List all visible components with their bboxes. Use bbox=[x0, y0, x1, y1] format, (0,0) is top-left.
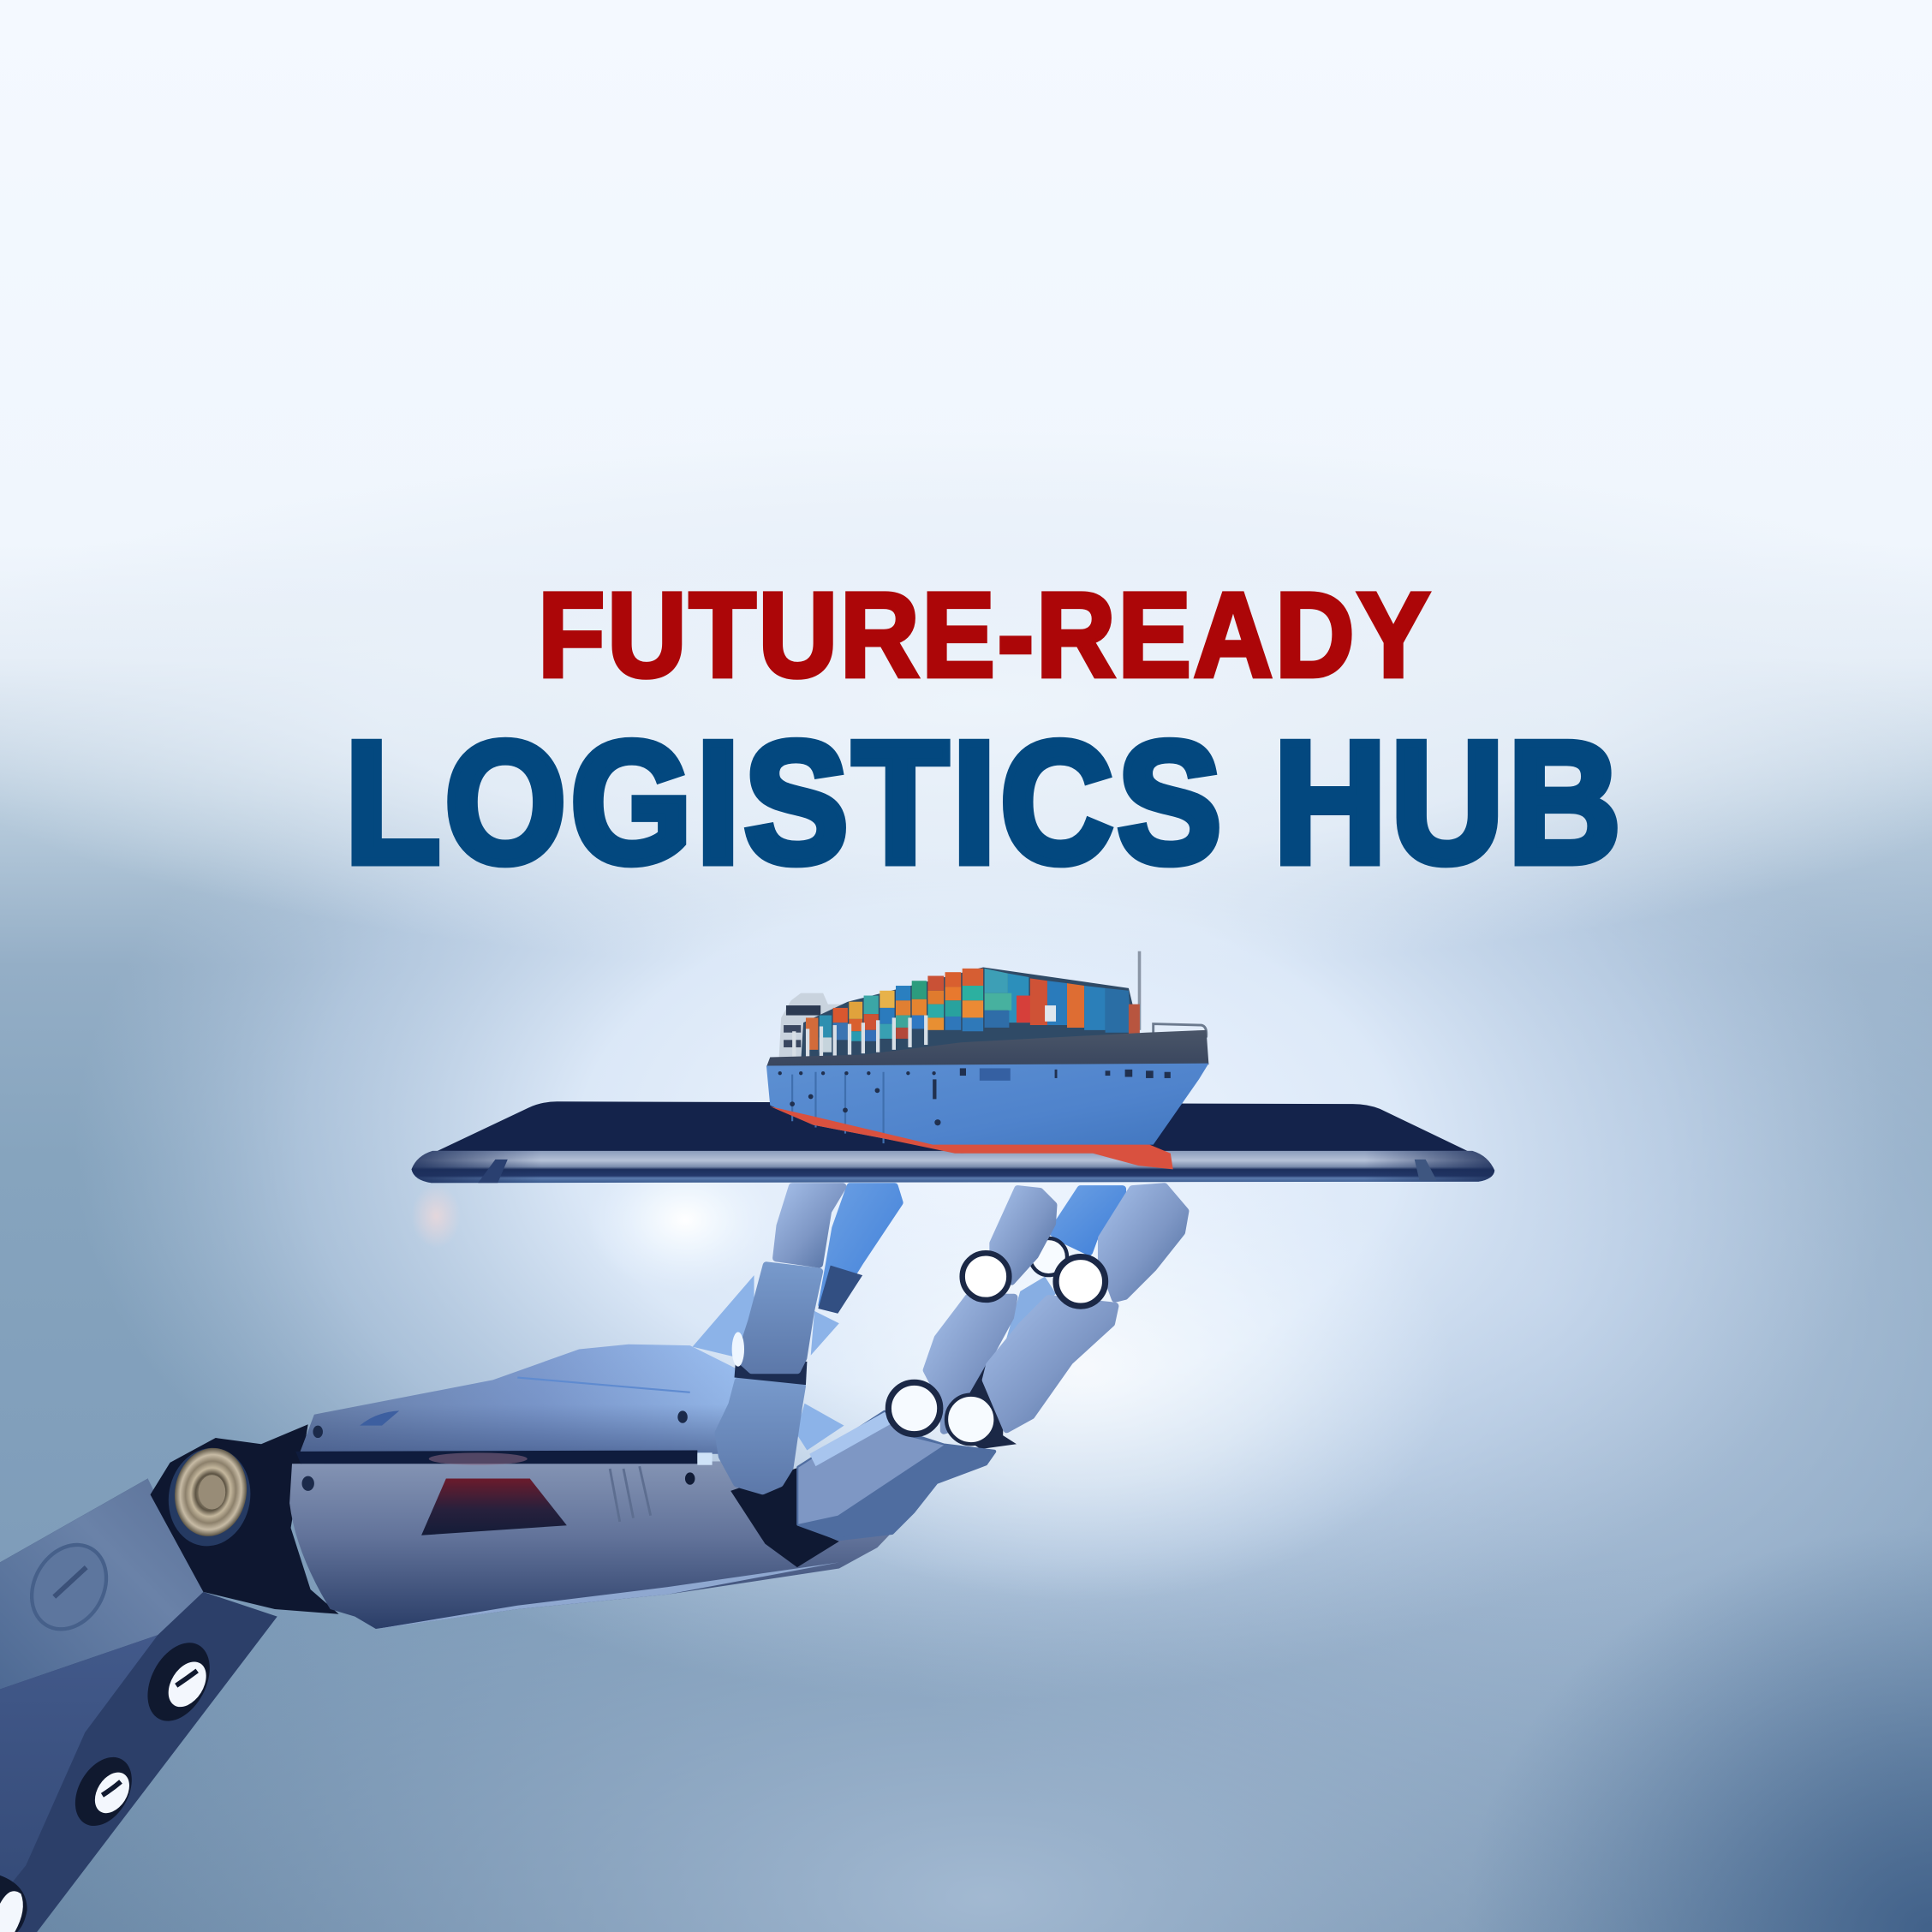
container stacks bbox=[801, 967, 1140, 1062]
title: FUTURE-READY: FUTURE-READY bbox=[538, 567, 1433, 702]
hull details bbox=[778, 1068, 1171, 1143]
robot arm bbox=[0, 1187, 1185, 1932]
tablet bbox=[412, 1101, 1494, 1183]
dark seam bbox=[295, 1450, 713, 1465]
upper arm bbox=[0, 1479, 277, 1932]
forearm lower shell bbox=[289, 1461, 930, 1629]
upper hull band bbox=[766, 1030, 1208, 1067]
deck bars bbox=[792, 1016, 927, 1062]
display window bbox=[421, 1479, 567, 1535]
superstructure bbox=[778, 993, 850, 1062]
blue hull bbox=[766, 1064, 1208, 1154]
title: LOGISTICS HUB: LOGISTICS HUB bbox=[345, 706, 1625, 898]
tablet edge bbox=[412, 1151, 1494, 1183]
thumb bbox=[798, 1382, 994, 1539]
finger: outer bbox=[946, 1187, 1185, 1449]
finger: third bbox=[927, 1189, 1123, 1430]
shoulder joint bbox=[151, 1424, 339, 1614]
palm back bbox=[693, 1275, 844, 1450]
mast bbox=[1138, 951, 1141, 1030]
finger: index lower and middle bbox=[719, 1187, 899, 1491]
tablet screen bbox=[432, 1101, 1472, 1154]
red keel and bulb bbox=[770, 1106, 1173, 1169]
forearm upper shell bbox=[300, 1345, 739, 1454]
container ship bbox=[766, 951, 1208, 1169]
bow railing bbox=[1154, 1024, 1207, 1037]
